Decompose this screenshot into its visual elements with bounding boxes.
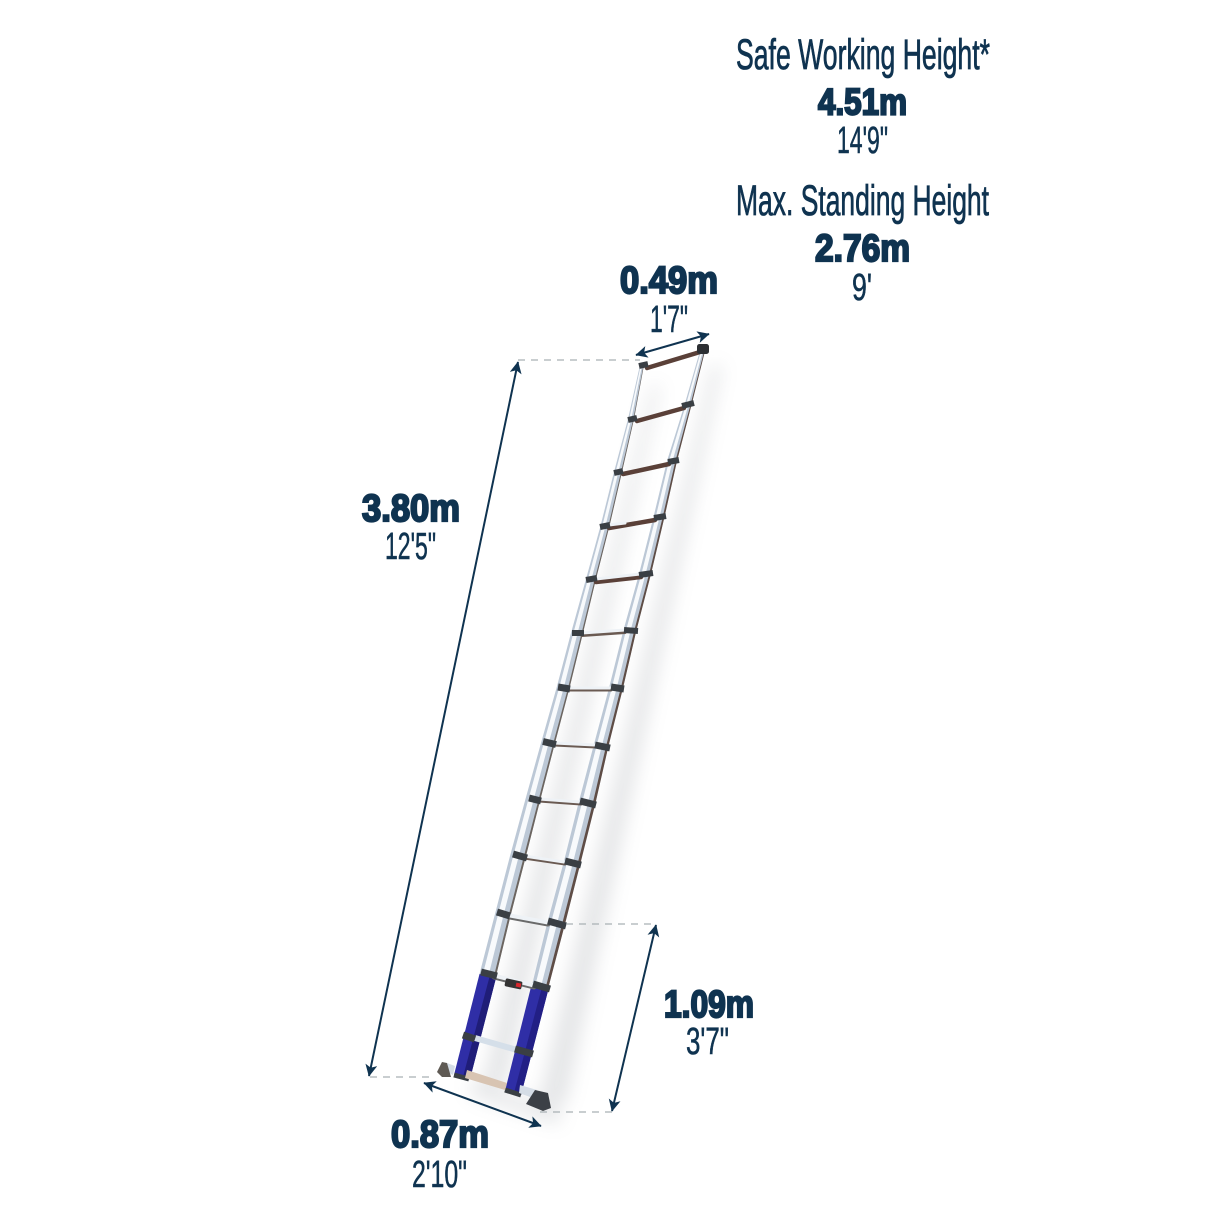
heading: max standing height: 9': [852, 267, 872, 309]
heading: safe working height: 14'9": [837, 120, 888, 162]
rail clamps: [454, 364, 694, 1095]
right rail: [532, 349, 706, 987]
dimension: closed height: [612, 925, 754, 1111]
ladder shadow: [470, 365, 722, 1125]
dimension: closed height: 3'7": [686, 1021, 729, 1063]
heading: max standing height: 2.76m: [815, 228, 910, 270]
heading: safe working height: Safe Working Height*: [736, 31, 990, 79]
dimension: top width: [620, 260, 718, 355]
dimension: closed height: 1.09m: [664, 984, 754, 1026]
heading: safe working height: 4.51m: [818, 82, 907, 122]
heading: safe working height: [736, 31, 990, 162]
top end cap: [697, 344, 709, 354]
guide lines: [370, 360, 655, 1112]
left rail: [480, 365, 644, 974]
heading: max standing height: Max. Standing Height: [736, 177, 989, 225]
dimension: base width: [391, 1083, 541, 1196]
blue base sections: [454, 974, 548, 1095]
dimension: extended length: [362, 362, 518, 1076]
rungs: [475, 352, 700, 1050]
lock button: [504, 978, 523, 990]
dimension: extended length: 3.80m: [362, 488, 460, 530]
dimension: top width: 1'7": [650, 299, 688, 341]
dimension: extended length: 12'5": [385, 526, 436, 568]
dimension: base width: 2'10": [412, 1154, 467, 1196]
stabiliser base: [437, 1062, 551, 1111]
heading: max standing height: [736, 177, 989, 309]
dimension: base width: 0.87m: [391, 1114, 489, 1156]
ladder illustration: [437, 344, 722, 1125]
dimension: top width: 0.49m: [620, 260, 718, 302]
